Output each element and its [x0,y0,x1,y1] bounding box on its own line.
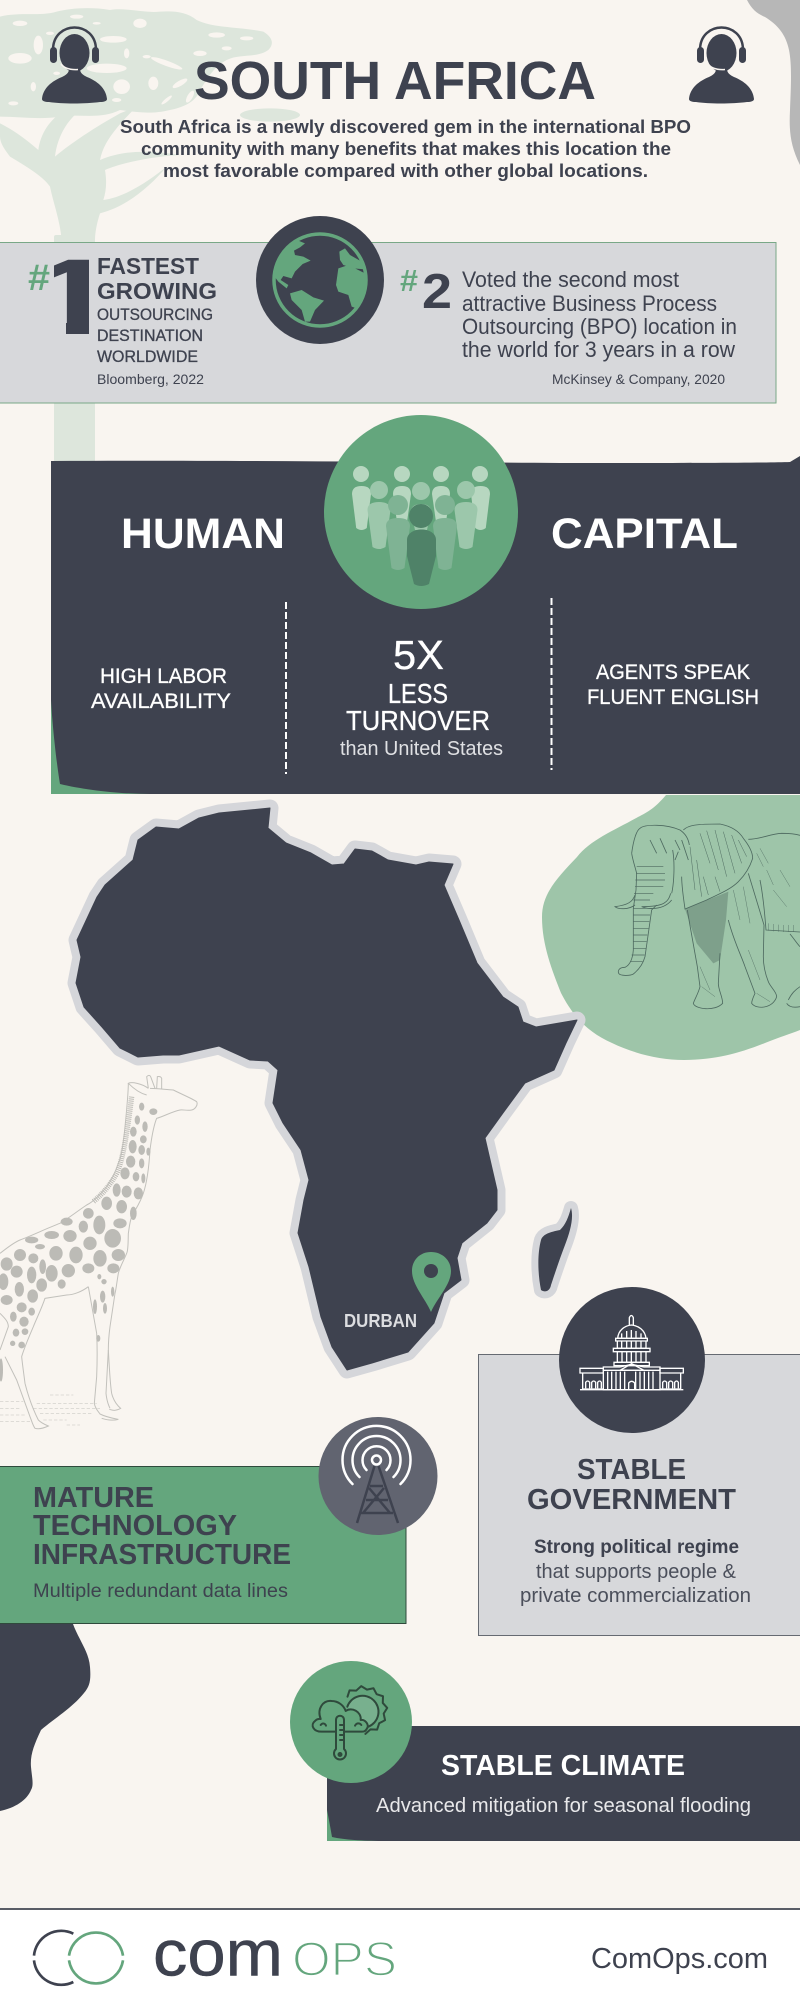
5X less turnover: TURNOVER [346,705,490,736]
rank 1 block [28,258,216,387]
icon: right headset agent [689,28,754,104]
rank 1 block: GROWING [97,278,217,304]
logo wordmark: OPS [292,1934,397,1986]
panel: stable climate: Advanced mitigation for seasonal flooding [376,1795,751,1817]
rank 2 block: # [400,263,418,298]
agents speak fluent english [587,661,759,709]
panel: technology infrastructure: Multiple redundant data lines [33,1581,288,1602]
panel: stable government: STABLE [577,1454,686,1486]
logo wordmark [153,1916,397,1990]
icon: capitol building [559,1287,705,1433]
panel: stable government: GOVERNMENT [527,1484,736,1516]
panel: rankings band [0,236,776,403]
intro text: South Africa is a newly discovered gem in the international BPO [120,117,691,137]
5X less turnover: than United States [340,738,503,760]
rank 2 block: the world for 3 years in a row [462,337,736,362]
panel: technology infrastructure [0,1417,438,1624]
rank 1 block: Bloomberg, 2022 [97,372,204,387]
title: SOUTH AFRICA [194,51,596,111]
map pin [412,1252,451,1312]
intro text: community with many benefits that makes this location the [141,139,671,159]
grey blob top right [747,0,800,165]
intro text [120,117,691,181]
5X less turnover: 5X [393,632,444,678]
agents speak fluent english: FLUENT ENGLISH [587,686,759,709]
panel: technology infrastructure: TECHNOLOGY [33,1510,237,1542]
high labor availability: AVAILABILITY [91,690,231,713]
rank 2 block: Voted the second most [462,267,680,292]
high labor availability: HIGH LABOR [100,665,227,688]
madagascar [538,1208,572,1291]
rank 1 block: OUTSOURCING [97,306,213,324]
panel: technology infrastructure: MATURE [33,1482,154,1514]
agents speak fluent english: AGENTS SPEAK [596,661,750,684]
africa map [76,808,577,1370]
rank 1 block: 1 [27,236,122,357]
footer [0,1908,800,2000]
panel: stable climate [290,1661,800,1841]
icon: left headset agent [42,28,107,104]
intro text: most favorable compared with other global locations. [163,161,648,181]
panel: stable climate: STABLE CLIMATE [441,1750,685,1782]
rank 1 block: WORLDWIDE [97,348,198,366]
rank 2 block: attractive Business Process [462,291,717,316]
website: ComOps.com [591,1943,768,1975]
panel: technology infrastructure: INFRASTRUCTURE [33,1539,291,1571]
green people circle [324,415,518,609]
panel: human capital: HUMAN [121,510,285,558]
durban label: DURBAN [344,1311,417,1331]
logo wordmark: com [153,1916,283,1990]
panel: human capital [51,415,800,794]
rank 2 block: 2 [422,265,452,319]
5X less turnover: LESS [388,678,448,709]
rank 1 block: FASTEST [97,253,199,279]
panel: stable government: that supports people & [536,1561,737,1583]
bottom-left dark blob [0,1624,90,1811]
logo mark [34,1931,123,1985]
high labor availability [91,665,231,713]
rank 2 block: Outsourcing (BPO) location in [462,314,737,339]
panel: stable government [478,1287,800,1636]
rank 2 block: McKinsey & Company, 2020 [552,372,725,387]
elephant panel [542,795,800,1060]
rank 1 block: # [28,257,50,298]
giraffe drawing [0,1075,197,1429]
rank 2 block [400,263,737,387]
panel: human capital: CAPITAL [551,510,738,558]
background tree [0,8,300,462]
icon: radio tower [318,1417,438,1535]
elephant drawing [615,824,800,1009]
icon: globe [256,216,384,344]
rank 1 block: DESTINATION [97,327,203,345]
5X less turnover [340,632,503,760]
panel: stable government: Strong political regime [534,1537,739,1558]
icon: weather and thermometer [290,1661,412,1783]
panel: stable government: private commercialization [520,1585,751,1607]
